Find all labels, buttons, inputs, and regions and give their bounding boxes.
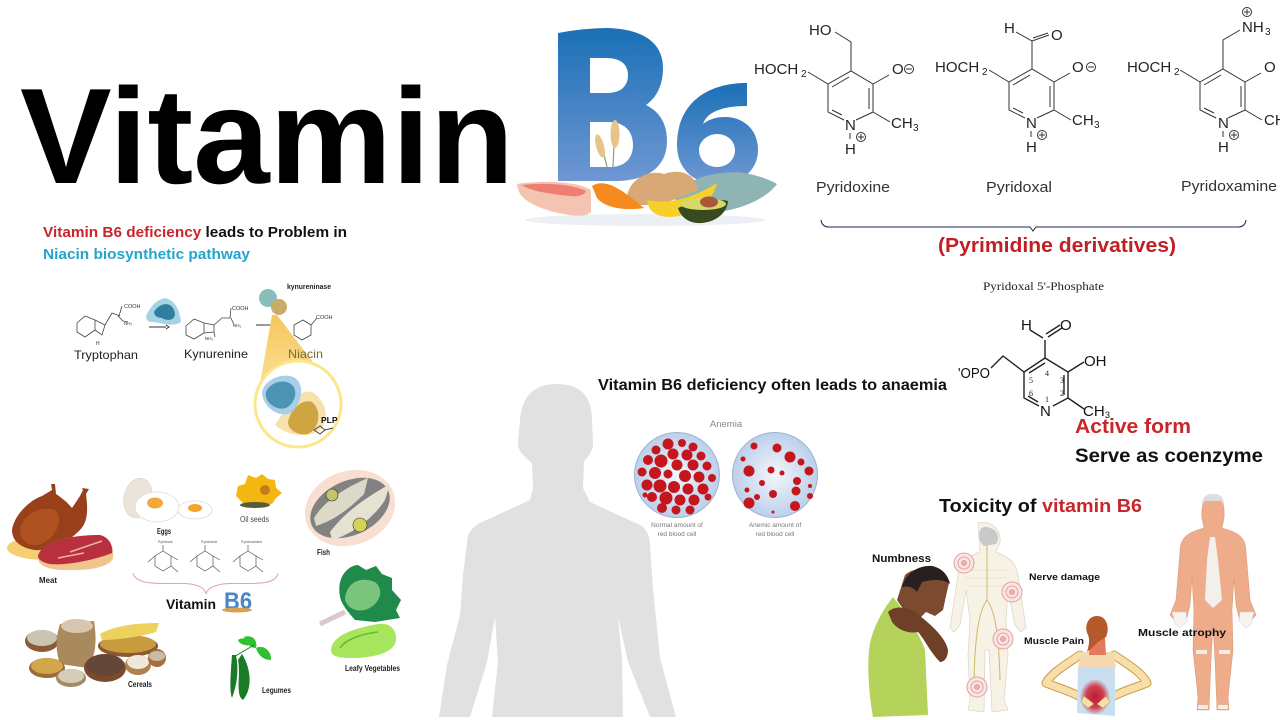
potatoes — [627, 172, 698, 205]
hands — [1172, 612, 1254, 628]
molecule: pyridoxal 5'-phosphate: 5 — [1029, 376, 1033, 385]
label: Kynurenine — [184, 347, 248, 361]
back — [1078, 652, 1116, 667]
molecule: pyridoxamine: 3 — [1265, 27, 1271, 38]
label: Anemia — [710, 419, 743, 430]
label: Pyridoxine — [816, 179, 890, 196]
vitamin B6 mini label: B6 — [224, 588, 252, 615]
tryptophan molecule: H — [96, 341, 100, 347]
pain glow — [1080, 679, 1110, 715]
avocado — [678, 200, 728, 223]
fish plate — [294, 457, 406, 559]
neck — [1089, 638, 1106, 655]
molecule: pyridoxal: H — [1026, 139, 1037, 156]
kynureninase label: kynureninase — [287, 282, 331, 291]
shirt — [868, 597, 928, 717]
label: Oil seeds — [240, 515, 269, 524]
kynurenine molecule: COOH — [232, 306, 249, 312]
vitamin B6 mini label: Vitamin — [166, 597, 216, 612]
molecule: pyridoxal 5'-phosphate: O — [1060, 317, 1072, 334]
pain rings — [954, 553, 1022, 697]
enzyme core — [154, 304, 175, 320]
molecule: pyridoxal 5'-phosphate: N — [1040, 403, 1051, 420]
arrow — [256, 323, 276, 327]
molecule: pyridoxine: H — [845, 141, 856, 158]
knees and feet — [1196, 652, 1230, 707]
molecule: pyridoxal 5'-phosphate: 4 — [1045, 369, 1049, 378]
label: red blood cell — [756, 531, 795, 538]
title: Vitamin: Vitamin — [20, 60, 514, 212]
label: Pyridoxamine — [1181, 178, 1277, 195]
molecule: pyridoxine: HO — [809, 22, 832, 39]
PLP label: PLP — [321, 415, 338, 425]
kynurenine molecule — [184, 306, 249, 361]
molecule: pyridoxamine: NH — [1242, 19, 1264, 36]
heading: toxicity: Toxicity of vitamin B6 — [939, 495, 1142, 516]
human silhouette — [439, 384, 676, 717]
anemia diagram — [634, 419, 818, 538]
molecule: pyridoxine: CH — [891, 115, 913, 132]
heading: pyrimidine derivatives: (Pyrimidine derivatives) — [938, 235, 1176, 257]
heading: anaemia: Vitamin B6 deficiency often leads to anaemia — [598, 377, 947, 394]
label — [749, 522, 801, 538]
mini molecules: Pyridoxamine — [241, 540, 262, 544]
molecule: pyridoxal 5'-phosphate: 2 — [1060, 389, 1064, 398]
arm — [888, 608, 948, 662]
label: Tryptophan — [74, 348, 138, 362]
molecule: pyridoxal 5'-phosphate: 3 — [1060, 376, 1064, 385]
diagram: niacin pathway — [74, 282, 341, 447]
niacin molecule — [288, 315, 333, 361]
label: Niacin — [288, 347, 323, 361]
molecule: pyridoxal 5'-phosphate: 1 — [1045, 395, 1049, 404]
label: Pyridoxal — [986, 179, 1052, 196]
tryptophan molecule: NH₂ — [124, 321, 132, 326]
arms — [1046, 655, 1147, 703]
PLP molecule — [314, 426, 333, 434]
banana — [647, 183, 717, 217]
nervous system body — [950, 522, 1100, 712]
wheat — [593, 120, 620, 167]
label: Numbness — [872, 553, 931, 565]
molecule: pyridoxal: O — [1072, 59, 1084, 76]
molecule: pyridoxine: O — [892, 61, 904, 78]
molecule: pyridoxine: 3 — [913, 123, 919, 134]
curly brace — [133, 573, 278, 594]
kynurenine molecule: NH₂ — [205, 336, 213, 341]
mini molecules: Pyridoxine — [201, 540, 217, 544]
label: Normal amount of — [651, 522, 703, 529]
label: Nerve damage — [1029, 572, 1100, 583]
hair — [1202, 494, 1224, 505]
molecule: pyridoxal 5'-phosphate: H — [1021, 317, 1032, 334]
numbness man — [868, 553, 950, 717]
steak — [517, 182, 591, 216]
label: Cereals — [128, 680, 152, 689]
molecule: pyridoxal 5'-phosphate: 3 — [1105, 410, 1110, 420]
vitamin B6 mini label — [166, 588, 252, 615]
label: red blood cell — [658, 531, 697, 538]
molecule: pyridoxamine: HOCH — [1127, 59, 1171, 76]
molecule: pyridoxal: H — [1004, 20, 1015, 37]
hair — [1086, 616, 1108, 652]
label: Leafy Vegetables — [345, 664, 400, 673]
molecule: pyridoxal: 2 — [982, 67, 988, 78]
normal blood — [634, 432, 720, 538]
digit 6 — [677, 83, 758, 184]
molecule: pyridoxine: HOCH — [754, 61, 798, 78]
tank top — [1077, 667, 1115, 716]
tryptophan molecule — [74, 304, 141, 362]
small enzyme — [259, 289, 287, 315]
label: Legumes — [262, 686, 291, 695]
kynurenine molecule: NH₂ — [233, 323, 241, 328]
label: Muscle atrophy — [1138, 627, 1226, 639]
meat — [7, 484, 113, 585]
legumes — [230, 636, 291, 700]
molecule: pyridoxal: N — [1026, 115, 1037, 132]
label: Meat — [39, 576, 57, 585]
molecule: pyridoxal: 3 — [1094, 120, 1100, 131]
cereals — [25, 619, 166, 689]
molecule: pyridoxine — [754, 22, 919, 196]
food sources panel — [7, 457, 406, 700]
eggs — [120, 476, 212, 536]
carrot — [592, 183, 644, 209]
heading: PLP: Pyridoxal 5'-Phosphate — [983, 279, 1104, 293]
hair — [902, 566, 950, 592]
enzyme — [146, 298, 181, 325]
molecule: pyridoxal: HOCH — [935, 59, 979, 76]
B6 logo with foods — [517, 28, 777, 226]
muscle body — [1138, 494, 1256, 710]
food shadow — [525, 214, 765, 226]
zoom circle — [255, 361, 341, 447]
molecule: pyridoxamine — [1127, 8, 1280, 195]
heading: niacin pathway — [43, 224, 347, 263]
molecule: pyridoxal 5'-phosphate: CH — [1083, 403, 1105, 420]
arm skin — [1046, 655, 1147, 703]
brace — [821, 220, 1246, 231]
label — [651, 522, 703, 538]
label: Anemic amount of — [749, 522, 801, 529]
label: serve as coenzyme: Serve as coenzyme — [1075, 446, 1263, 467]
mini molecules — [148, 540, 263, 572]
letter B — [558, 28, 667, 181]
hands — [1081, 696, 1110, 708]
oil seeds — [236, 474, 282, 524]
molecule: pyridoxamine: N — [1218, 115, 1229, 132]
label: Muscle Pain — [1024, 636, 1084, 647]
neck and head — [897, 569, 949, 621]
molecule: pyridoxine: N — [845, 117, 856, 134]
niacin molecule: COOH — [316, 315, 333, 321]
highlight cone — [258, 315, 316, 395]
mini molecules: Pyridoxal — [158, 540, 173, 544]
molecule: pyridoxamine: H — [1218, 139, 1229, 156]
leafy vegetables — [320, 565, 401, 673]
molecule: pyridoxamine: 2 — [1174, 67, 1180, 78]
tryptophan molecule: COOH — [124, 304, 141, 310]
heading: niacin pathway: Vitamin B6 deficiency leads to Problem in — [43, 224, 347, 241]
label: Eggs — [157, 527, 171, 536]
arrow — [149, 325, 169, 329]
molecule: pyridoxamine: O — [1264, 59, 1276, 76]
molecule: pyridoxal — [935, 20, 1100, 196]
back pain woman — [1024, 616, 1147, 716]
molecule: pyridoxal 5'-phosphate: 'OPO — [958, 365, 990, 382]
molecule: pyridoxal: CH — [1072, 112, 1094, 129]
heading: niacin pathway: Niacin biosynthetic pathway — [43, 246, 251, 263]
label: active form: Active form — [1075, 416, 1191, 438]
molecule: pyridoxal: O — [1051, 27, 1063, 44]
molecule: pyridoxal 5'-phosphate: 6 — [1029, 389, 1033, 398]
molecule: pyridoxine: 2 — [801, 69, 807, 80]
label: Fish — [317, 548, 330, 557]
fish — [670, 172, 777, 212]
molecule: pyridoxal 5'-phosphate: OH — [1084, 353, 1106, 370]
body — [1170, 495, 1256, 710]
molecule: pyridoxal 5'-phosphate — [958, 317, 1110, 420]
anemic blood — [732, 432, 818, 538]
chest tendon — [1205, 537, 1222, 608]
toxicity illustration — [868, 494, 1256, 717]
